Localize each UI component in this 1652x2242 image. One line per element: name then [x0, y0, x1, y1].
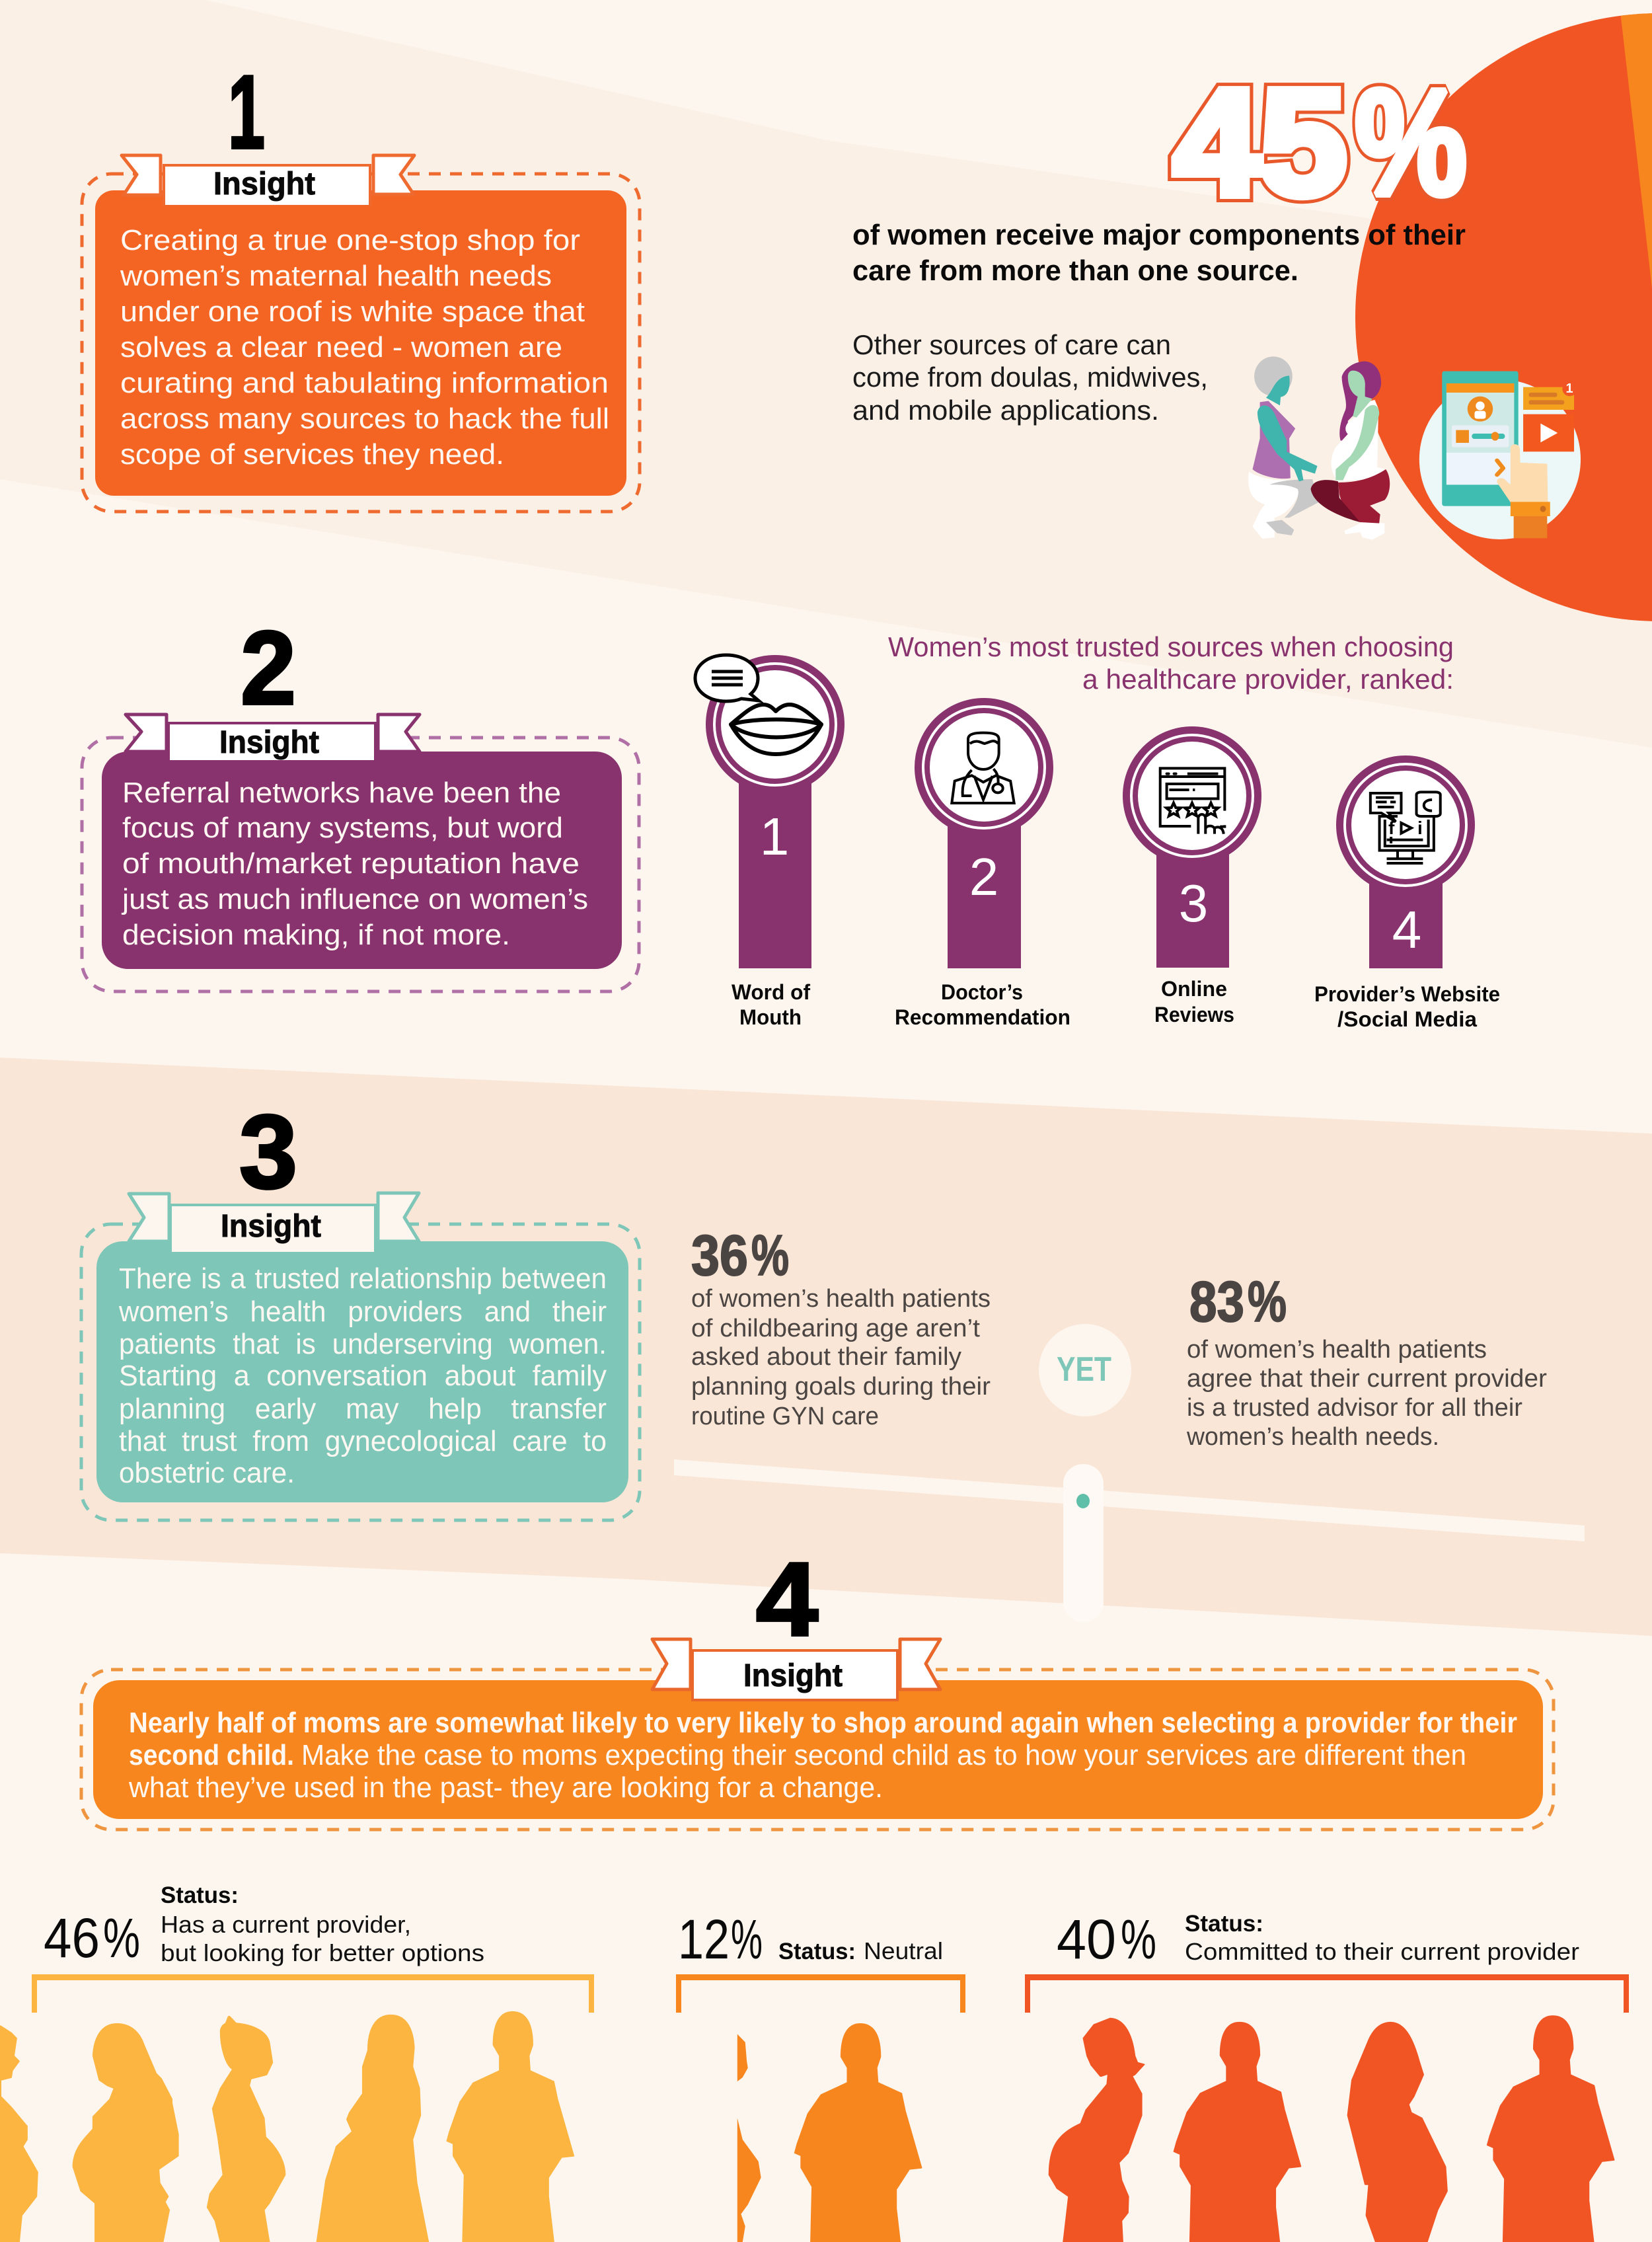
insight 2 text	[121, 777, 588, 951]
group: 12 percent neutral: %	[731, 1908, 763, 1970]
icon: monitor with social media: f	[1388, 818, 1395, 838]
insight 3 text: There is a trusted relationship between	[119, 1262, 607, 1295]
stat: 36 percent: 36	[691, 1224, 748, 1288]
insight 4 text: second child.	[129, 1739, 294, 1771]
group: 12 percent neutral	[676, 1908, 965, 2242]
pie circle	[1355, 0, 1652, 621]
stat: 45 percent: 45	[1174, 59, 1347, 227]
group: 40 percent committed: Status:	[1185, 1911, 1263, 1937]
stat: 36 percent: of childbearing age aren’t	[691, 1315, 980, 1342]
insight 3 text: women’s health providers and their	[118, 1295, 607, 1328]
other sources text	[852, 329, 1208, 426]
label: provider's website / social media: /Social Media	[1337, 1007, 1477, 1031]
insight 4 text: what they’ve used in the past- they are looking for a change.	[128, 1771, 883, 1804]
icon: doctor	[952, 733, 1014, 803]
stat: 83 percent: agree that their current provider	[1187, 1365, 1547, 1393]
stat: 36 percent: planning goals during their	[691, 1373, 991, 1401]
silhouettes: orange group	[737, 2024, 920, 2242]
stat description	[852, 219, 1466, 287]
insight 2 text: just as much influence on women’s	[121, 883, 588, 915]
rank 1: word of mouth	[695, 655, 845, 968]
stat: 45 percent: %	[1355, 59, 1467, 227]
insight 4 text	[128, 1707, 1517, 1804]
label: online reviews	[1154, 977, 1234, 1026]
rank number 4: 4	[1392, 900, 1421, 959]
stat: 83 percent: women’s health needs.	[1186, 1423, 1439, 1451]
insight 2 label: Insight	[219, 725, 319, 760]
group: 12 percent neutral: 12	[678, 1908, 730, 1970]
stat description: of women receive major components of their	[852, 219, 1466, 251]
rank 3: online reviews	[1123, 726, 1261, 968]
icon: monitor with social media	[1370, 792, 1441, 863]
silhouettes: yellow group	[0, 2012, 573, 2242]
insight 3 text: Starting a conversation about family	[119, 1360, 607, 1392]
panel: insight 4	[81, 1541, 1554, 1830]
label: online reviews: Online	[1161, 977, 1227, 1001]
stat: 83 percent: %	[1248, 1270, 1287, 1334]
rank number 3: 3	[1179, 874, 1208, 933]
insight 3 text: that trust from gynecological care to	[119, 1425, 607, 1457]
insight 3 text: planning early may help transfer	[119, 1393, 607, 1425]
insight 1 label: Insight	[213, 167, 315, 202]
stat description: care from more than one source.	[852, 254, 1298, 287]
label: doctor's recommendation: Recommendation	[895, 1005, 1070, 1029]
notification count: 1	[1565, 381, 1573, 396]
yet badge	[1039, 1324, 1131, 1416]
icon: review window	[1160, 768, 1224, 834]
label: doctor's recommendation	[895, 980, 1070, 1029]
stat: 36 percent: routine GYN care	[691, 1403, 879, 1430]
heading: trusted sources: Women’s most trusted sources when choosing	[888, 631, 1454, 662]
rank number 1: 1	[760, 807, 789, 866]
panel: insight 2	[82, 610, 639, 991]
insight 1 text: under one roof is white space that	[120, 295, 585, 328]
stat: 45 percent: 45	[1174, 59, 1347, 227]
other sources text: and mobile applications.	[852, 395, 1159, 426]
label: provider's website / social media: Provider’s Website	[1314, 982, 1500, 1006]
number 2: 2	[241, 610, 296, 726]
label: provider's website / social media	[1314, 982, 1500, 1031]
bracket	[679, 1977, 963, 2013]
insight 3 text	[118, 1262, 607, 1489]
heading: trusted sources	[888, 631, 1454, 695]
number 4: 4	[756, 1541, 818, 1658]
insight 1 text: women’s maternal health needs	[120, 260, 552, 292]
group: 46 percent looking for better options: 46	[44, 1907, 100, 1969]
group: 40 percent committed: %	[1121, 1908, 1156, 1970]
insight 1 text: Creating a true one-stop shop for	[120, 224, 580, 256]
group: 40 percent committed	[1025, 1908, 1629, 2242]
group: 40 percent committed: 40	[1057, 1908, 1116, 1970]
group: 46 percent looking for better options: %	[103, 1907, 140, 1969]
insight 1 text: curating and tabulating information	[120, 367, 609, 399]
yet badge: YET	[1057, 1350, 1111, 1389]
panel: insight 1	[82, 54, 640, 512]
number 3: 3	[239, 1094, 297, 1210]
label: word of mouth	[732, 980, 810, 1029]
group: 46 percent looking for better options: but looking for better options	[161, 1939, 484, 1966]
bracket	[1028, 1977, 1626, 2013]
stat: 36 percent: %	[751, 1224, 789, 1288]
insight 1 text: solves a clear need - women are	[120, 331, 562, 364]
rank 2: doctor	[915, 698, 1053, 968]
label: doctor's recommendation: Doctor’s	[941, 980, 1023, 1004]
group: 12 percent neutral: Neutral	[864, 1937, 943, 1964]
stat: 36 percent	[691, 1224, 991, 1430]
icon: lips	[731, 705, 821, 754]
icon: monitor with social media: i	[1417, 818, 1423, 838]
insight 4 label: Insight	[743, 1658, 843, 1693]
other sources text: come from doulas, midwives,	[852, 362, 1208, 393]
insight 1 text: across many sources to hack the full	[120, 403, 609, 435]
insight 4 text: Make the case to moms expecting their second child as to how your services are different then	[301, 1739, 1466, 1771]
silhouettes: red group	[1050, 2016, 1614, 2242]
group: 46 percent looking for better options: Status:	[161, 1882, 239, 1908]
group: 46 percent looking for better options: Has a current provider,	[161, 1911, 411, 1938]
insight 1 text	[120, 224, 609, 471]
label: word of mouth: Word of	[732, 980, 810, 1004]
rank number 2: 2	[969, 847, 998, 906]
stat: 83 percent: is a trusted advisor for all their	[1187, 1394, 1522, 1422]
other sources text: Other sources of care can	[852, 329, 1171, 360]
group: 46 percent looking for better options	[0, 1882, 594, 2242]
illustration: two women	[1248, 356, 1390, 540]
insight 1 text: scope of services they need.	[120, 438, 504, 471]
insight 3 text: obstetric care.	[119, 1457, 295, 1489]
insight 4 text: Nearly half of moms are somewhat likely to very likely to shop around again when selecting a provider for their	[129, 1707, 1517, 1739]
background band: top	[0, 0, 1652, 748]
background band: section 3	[0, 1058, 1652, 1636]
insight 3 text: patients that is underserving women.	[119, 1328, 607, 1360]
stat: 36 percent: of women’s health patients	[691, 1285, 991, 1313]
scale: balance	[674, 1459, 1585, 1622]
insight 2 text: decision making, if not more.	[122, 919, 510, 951]
stat: 45 percent	[1174, 59, 1467, 227]
bracket	[34, 1977, 591, 2013]
panel: insight 3	[81, 1094, 640, 1520]
group: 12 percent neutral: Status:	[778, 1939, 856, 1964]
illustration: mobile app	[1419, 371, 1581, 539]
rank 4: website and social media	[1336, 755, 1475, 968]
stat: 83 percent: 83	[1189, 1270, 1244, 1334]
stat: 36 percent: asked about their family	[691, 1343, 961, 1371]
insight 3 label: Insight	[221, 1209, 321, 1244]
insight 2 text: focus of many systems, but word	[122, 812, 563, 844]
icon: speech bubble	[695, 655, 759, 701]
number 1: 1	[228, 54, 265, 171]
insight 2 text: Referral networks have been the	[122, 777, 561, 809]
label: online reviews: Reviews	[1154, 1003, 1234, 1026]
label: word of mouth: Mouth	[739, 1005, 802, 1029]
heading: trusted sources: a healthcare provider, ranked:	[1082, 664, 1454, 695]
stat: 83 percent: of women’s health patients	[1187, 1336, 1487, 1364]
insight 2 text: of mouth/market reputation have	[122, 847, 580, 880]
stat: 45 percent: %	[1355, 59, 1467, 227]
stat: 83 percent	[1186, 1270, 1547, 1451]
group: 40 percent committed: Committed to their current provider	[1185, 1938, 1579, 1965]
